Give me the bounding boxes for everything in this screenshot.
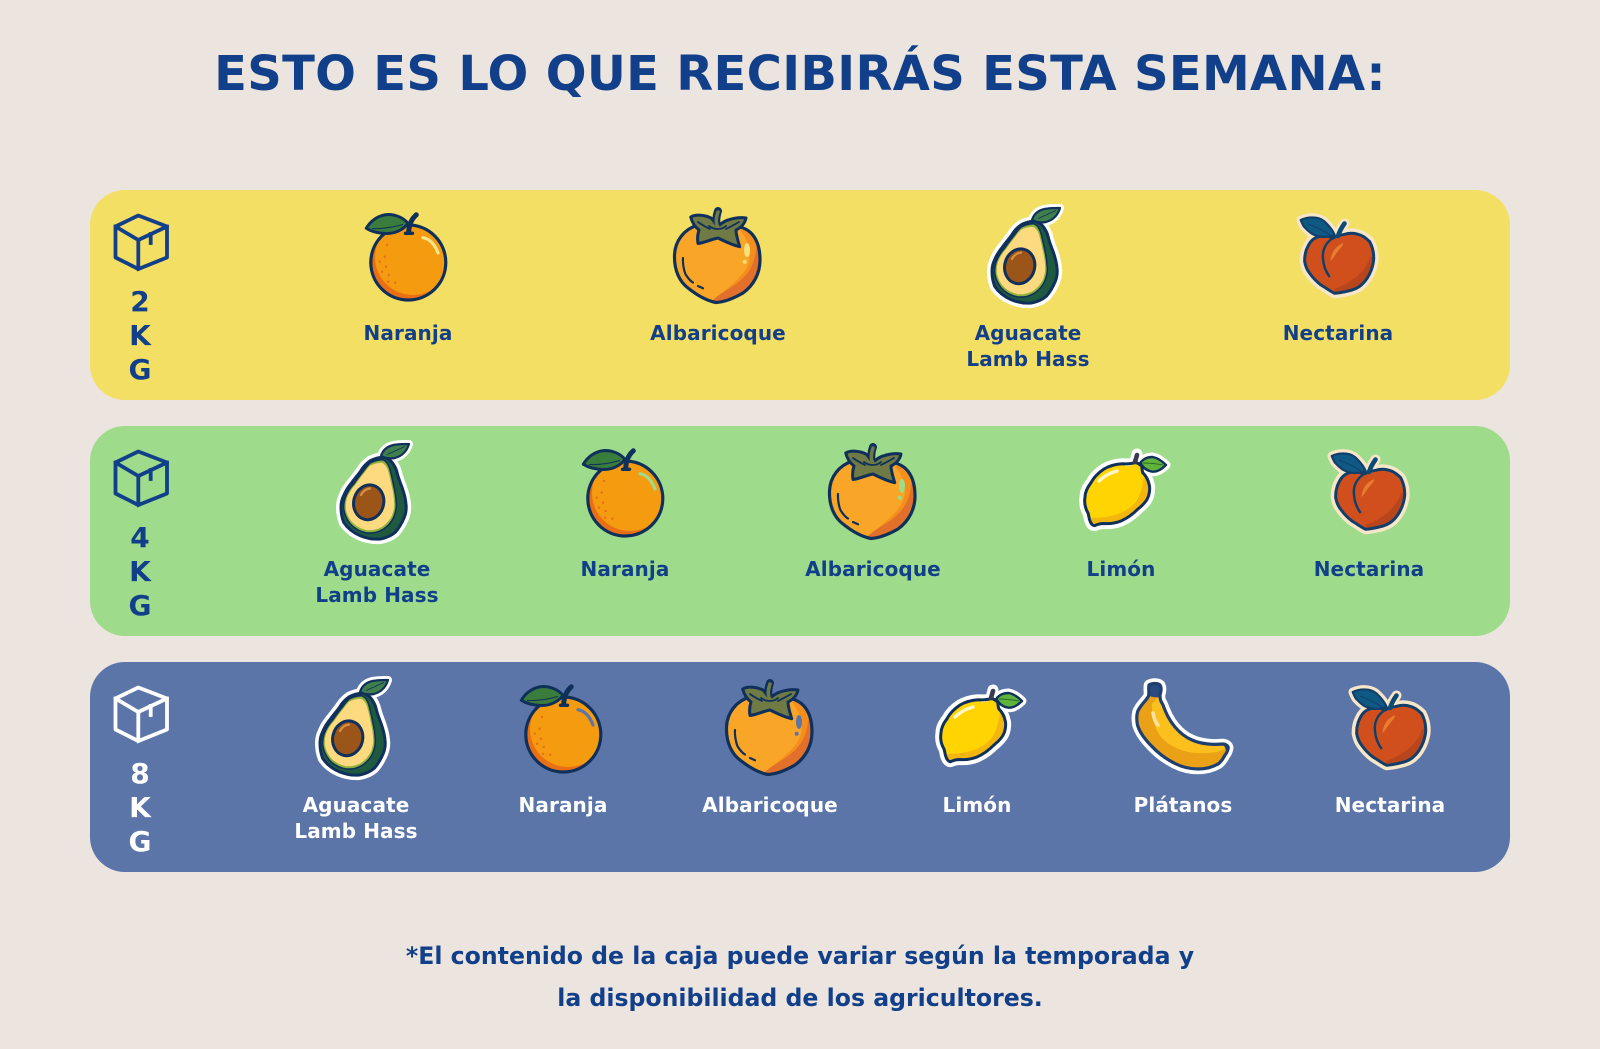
item: Nectarina: Nectarina — [1314, 557, 1424, 581]
item: Nectarina: Nectarina — [1335, 793, 1445, 817]
footnote — [406, 942, 1194, 1012]
panel: 2 kg box — [90, 190, 1510, 400]
item: Albaricoque — [650, 211, 786, 345]
item: Albaricoque: Albaricoque — [702, 793, 838, 817]
item: Nectarina: Nectarina — [1283, 321, 1393, 345]
panel background yellow — [90, 190, 1510, 400]
item: Limón — [937, 690, 1022, 817]
footnote: la disponibilidad de los agricultores. — [557, 984, 1043, 1012]
item: Aguacate Lamb Hass: Aguacate — [324, 557, 430, 581]
weight label 4 KG: K — [129, 555, 152, 588]
item: Limón — [1081, 454, 1166, 581]
panel: 8 kg box — [90, 662, 1510, 872]
weight label 8 KG: K — [129, 791, 152, 824]
icon: box — [116, 688, 167, 741]
weight label 4 KG: G — [129, 589, 151, 622]
item: Aguacate Lamb Hass: Lamb Hass — [315, 583, 439, 607]
item: Naranja — [581, 450, 669, 581]
item: Nectarina — [1314, 453, 1424, 581]
item: Albaricoque — [702, 683, 838, 817]
item: Albaricoque — [805, 447, 941, 581]
item: Nectarina — [1335, 689, 1445, 817]
item: Aguacate Lamb Hass: Aguacate — [303, 793, 409, 817]
item: Naranja — [364, 214, 452, 345]
item: Aguacate Lamb Hass — [294, 680, 418, 843]
weight label 4 KG — [129, 521, 152, 622]
item: Aguacate Lamb Hass: Lamb Hass — [966, 347, 1090, 371]
item: Naranja: Naranja — [519, 793, 607, 817]
weight label 8 KG — [129, 757, 152, 858]
item: Naranja: Naranja — [581, 557, 669, 581]
title: ESTO ES LO QUE RECIBIRÁS ESTA SEMANA: — [214, 45, 1386, 102]
item: Aguacate Lamb Hass: Lamb Hass — [294, 819, 418, 843]
weight label 2 KG — [129, 285, 152, 386]
weight label 2 KG: K — [129, 319, 152, 352]
weight label 8 KG: 8 — [130, 757, 150, 790]
weight label 2 KG: 2 — [130, 285, 150, 318]
panel background green — [90, 426, 1510, 636]
weight label 8 KG: G — [129, 825, 151, 858]
item: Albaricoque: Albaricoque — [650, 321, 786, 345]
item: Naranja — [519, 686, 607, 817]
weight label 4 KG: 4 — [130, 521, 150, 554]
item: Limón: Limón — [943, 793, 1011, 817]
item: Naranja: Naranja — [364, 321, 452, 345]
panel background blue — [90, 662, 1510, 872]
panel: 4 kg box — [90, 426, 1510, 636]
footnote: *El contenido de la caja puede variar según la temporada y — [406, 942, 1194, 970]
icon: box — [116, 452, 167, 505]
icon: box — [116, 216, 167, 269]
item: Aguacate Lamb Hass — [966, 208, 1090, 371]
item: Albaricoque: Albaricoque — [805, 557, 941, 581]
item: Plátanos: Plátanos — [1134, 793, 1232, 817]
item: Limón: Limón — [1087, 557, 1155, 581]
item: Aguacate Lamb Hass — [315, 444, 439, 607]
weight label 2 KG: G — [129, 353, 151, 386]
item: Plátanos — [1134, 679, 1233, 817]
item: Nectarina — [1283, 217, 1393, 345]
item: Aguacate Lamb Hass: Aguacate — [975, 321, 1081, 345]
